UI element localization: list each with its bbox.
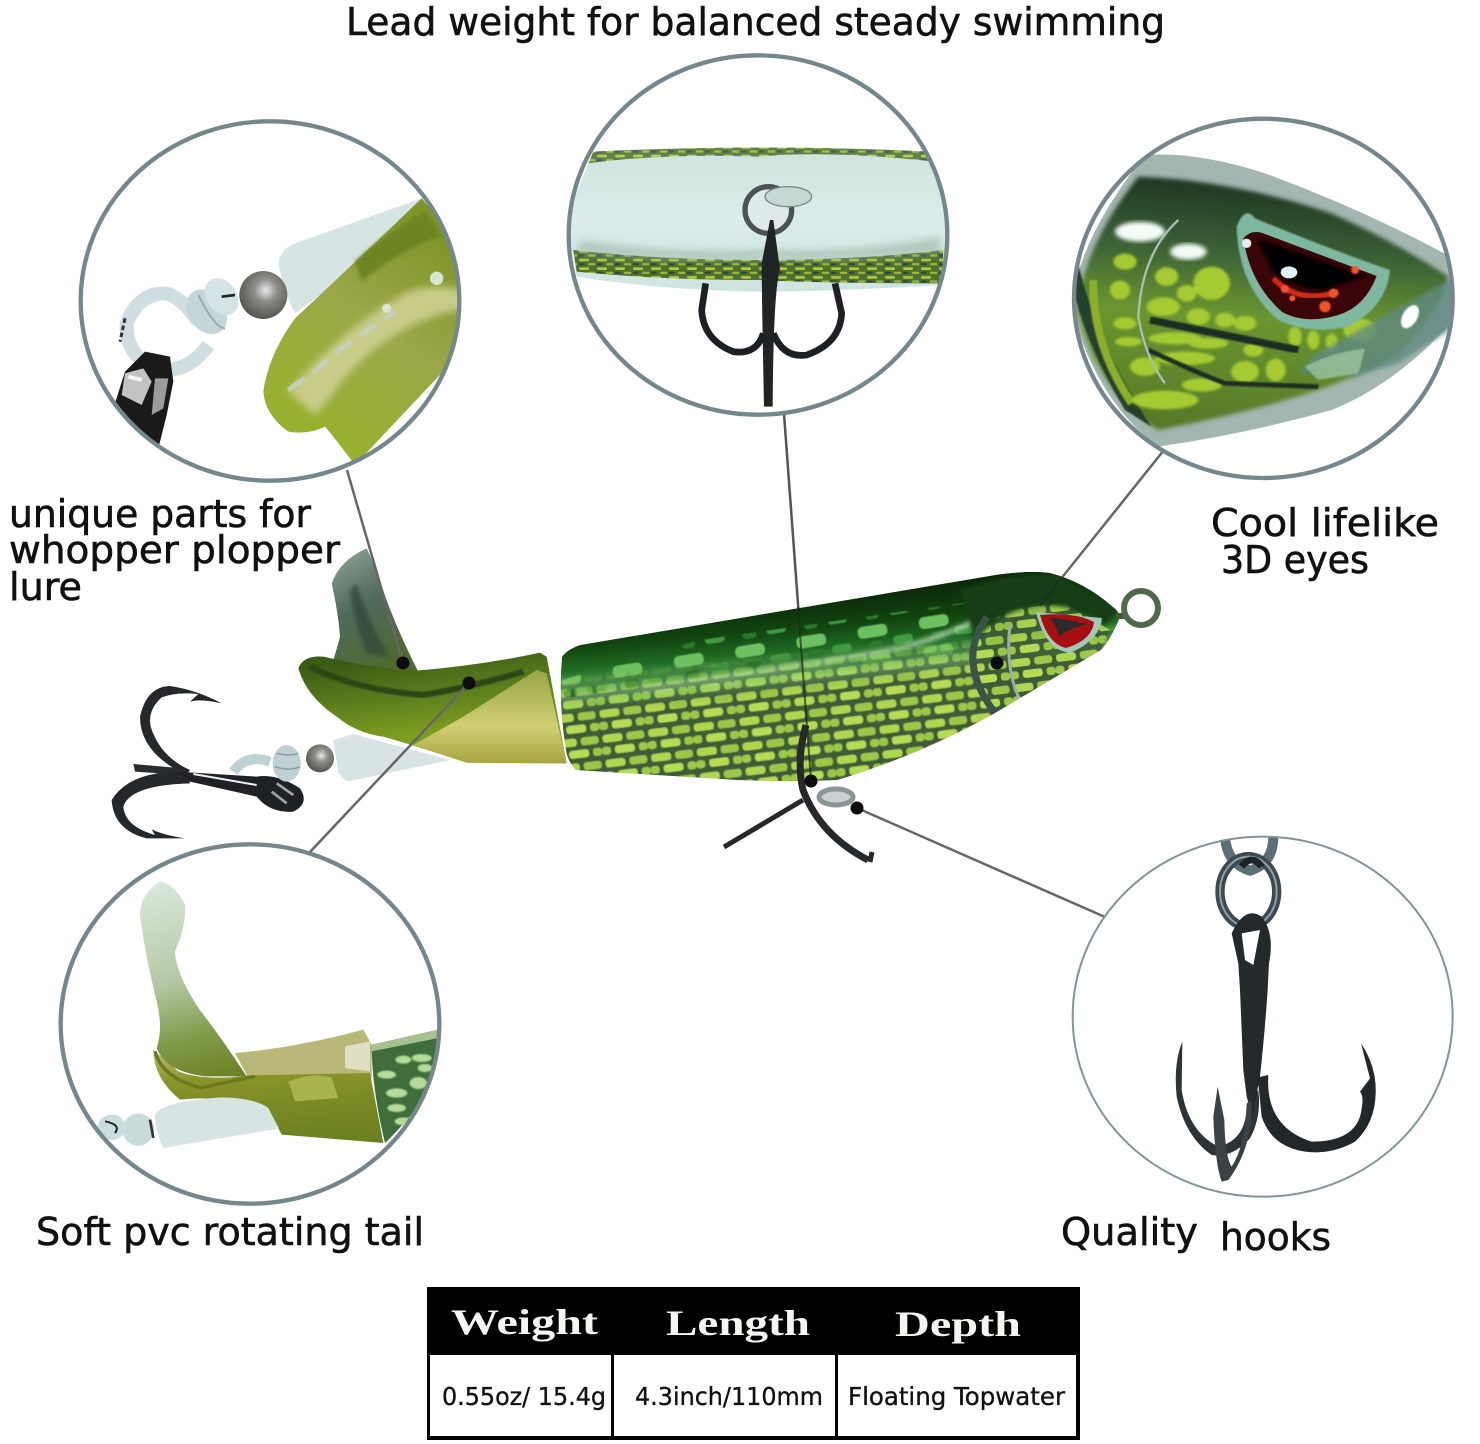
label: quality hooks xyxy=(1061,1210,1331,1259)
lure: main product image xyxy=(112,470,1158,862)
panel: quality hooks detail circle xyxy=(1073,837,1453,1197)
leader overlay: rotating tail xyxy=(310,683,469,852)
gold section xyxy=(413,670,567,763)
header: weight: Weight xyxy=(451,1302,598,1342)
gill arcs xyxy=(973,617,995,713)
label: soft pvc rotating tail: Soft pvc rotating tail xyxy=(36,1210,424,1254)
circle outline xyxy=(81,121,459,481)
pointer dots xyxy=(396,656,1004,814)
cell: depth value xyxy=(838,1355,1076,1436)
specification table xyxy=(427,1287,1080,1440)
circle outline xyxy=(1073,837,1453,1197)
label: cool lifelike 3D eyes xyxy=(1211,501,1439,582)
head top xyxy=(960,574,1118,640)
cell: depth value: Floating Topwater xyxy=(848,1382,1066,1411)
title: lead weight: Lead weight for balanced steady swimming xyxy=(346,0,1165,44)
label: quality hooks: hooks xyxy=(1220,1215,1331,1259)
leader overlay: tail parts xyxy=(347,470,403,663)
belly hook xyxy=(724,725,872,862)
panel: tail parts detail circle xyxy=(81,121,465,481)
detail: treble hook xyxy=(1176,837,1376,1182)
circle outline xyxy=(61,844,439,1204)
header: length: Length xyxy=(666,1303,810,1343)
header: depth: Depth xyxy=(895,1304,1021,1344)
lure body xyxy=(560,572,1119,781)
detail: lure head with eye xyxy=(1072,155,1457,447)
white tube xyxy=(333,734,450,782)
panel: lead weight detail circle xyxy=(567,55,950,415)
eye socket xyxy=(1036,612,1102,653)
hook: rear treble xyxy=(112,686,304,838)
green tail cup xyxy=(298,653,567,763)
panel: 3D eye detail circle xyxy=(1072,119,1457,478)
cell: length value: 4.3inch/110mm xyxy=(635,1382,823,1411)
label: unique parts xyxy=(9,492,340,609)
detail: tail close-up xyxy=(113,198,465,465)
eye xyxy=(1040,614,1094,648)
nose eyelet xyxy=(1116,591,1158,625)
detail: lure belly with hook xyxy=(567,147,950,407)
head scales xyxy=(975,598,1110,713)
table frame xyxy=(427,1287,1080,1440)
label: cool lifelike 3D eyes: Cool lifelike xyxy=(1211,501,1439,545)
circle outline xyxy=(569,55,947,415)
leader overlay: eyes over head xyxy=(1040,578,1062,606)
cell: weight value xyxy=(430,1355,611,1436)
tail assembly xyxy=(233,548,567,782)
detail: soft pvc tail xyxy=(98,881,438,1148)
leader line: eyes xyxy=(1060,450,1164,580)
label: unique parts: lure xyxy=(9,565,82,609)
circle outline xyxy=(1074,119,1453,478)
leader line: weight xyxy=(784,414,811,780)
grey fin xyxy=(332,548,420,675)
label: unique parts: unique parts for xyxy=(9,492,311,536)
white swivel xyxy=(233,759,270,772)
label: cool lifelike 3D eyes: 3D eyes xyxy=(1221,538,1369,582)
cell: length value xyxy=(614,1355,835,1436)
mottled upper band xyxy=(562,600,985,715)
panel: rotating tail detail circle xyxy=(61,844,439,1204)
scale pattern xyxy=(560,623,1117,781)
cell: weight value: 0.55oz/ 15.4g xyxy=(442,1382,606,1411)
leader line: hooks xyxy=(857,808,1105,917)
leader overlay: weight over body xyxy=(798,607,811,780)
pale highlight streak xyxy=(640,615,985,690)
label: unique parts: whopper plopper xyxy=(9,528,340,572)
label: quality hooks: Quality xyxy=(1061,1210,1198,1254)
